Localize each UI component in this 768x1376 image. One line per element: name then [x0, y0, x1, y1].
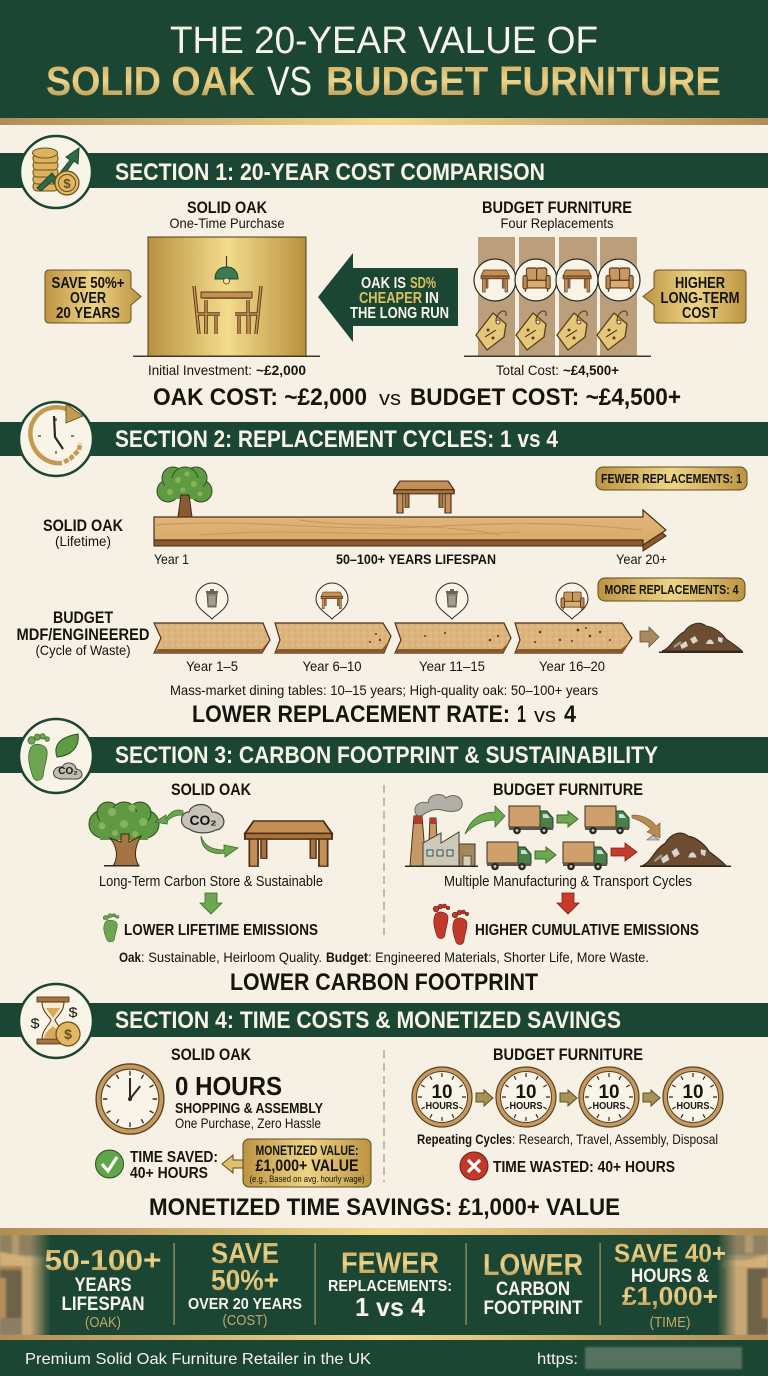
arrow: co2 to tree [155, 810, 183, 824]
arrow: oak is cheaper: IN [425, 290, 439, 307]
label: budget mdf: BUDGET [53, 608, 114, 627]
icon: green check [96, 1150, 124, 1178]
label: solid oak: SOLID OAK [187, 198, 268, 217]
caption: initial investment: ~£2,000 [256, 362, 306, 378]
year labels: Year 1–5 [186, 658, 238, 674]
footer tagline: Premium Solid Oak Furniture Retailer in the UK [25, 1351, 371, 1368]
caption: multiple cycles: Multiple Manufacturing & Transport Cycles [444, 873, 692, 890]
arrow: oak is cheaper [318, 253, 458, 342]
blurred url [585, 1347, 742, 1369]
label: solid oak lifetime: (Lifetime) [55, 533, 111, 549]
section 2 heading bar: SECTION 2: REPLACEMENT CYCLES: 1 vs 4 [115, 426, 559, 453]
stat: save 50: (COST) [222, 1312, 268, 1329]
arrow: co2 to table [201, 836, 238, 857]
label: solid oak lifetime: SOLID OAK [43, 516, 124, 535]
panel: solid oak carbon [89, 780, 332, 942]
stat: fewer replacements: FEWER [341, 1247, 439, 1280]
stat: lifespan: YEARS [74, 1275, 132, 1296]
dashed divider [383, 785, 385, 935]
label: budget mdf: (Cycle of Waste) [36, 642, 130, 658]
summary: cost [153, 384, 681, 411]
section 4 heading bar [0, 1003, 768, 1037]
stat: save time: HOURS & [631, 1266, 709, 1287]
caption: total cost: ~£4,500+ [563, 362, 619, 378]
icons: ten hour clocks [412, 1067, 723, 1127]
section 4 heading bar: SECTION 4: TIME COSTS & MONETIZED SAVINGS [115, 1007, 621, 1034]
badge: fewer replacements [596, 467, 747, 490]
callout: monetized value: £1,000+ VALUE [256, 1156, 358, 1175]
arrow: down red [557, 893, 579, 914]
arrow: to landfill [640, 627, 659, 647]
callout: monetized value [243, 1139, 371, 1187]
text: time saved: TIME SAVED: [130, 1149, 218, 1166]
callout: save 50% [45, 270, 141, 323]
caption: initial investment: Initial Investment: [148, 362, 252, 378]
icons: replacement pins [196, 583, 588, 619]
panel: budget furniture cost [464, 198, 651, 378]
callout: monetized value: MONETIZED VALUE: [256, 1142, 358, 1158]
label: solid oak: SOLID OAK [171, 780, 252, 799]
stat: save time: (TIME) [650, 1314, 690, 1331]
icon: dining table and chairs [194, 286, 261, 334]
label: budget mdf: MDF/ENGINEERED [16, 625, 150, 644]
icon: green footprint [103, 914, 119, 942]
panel: budget carbon [405, 780, 731, 945]
timeline labels: 50–100+ YEARS LIFESPAN [336, 551, 496, 567]
base line [133, 356, 320, 357]
note: oak vs budget: : Engineered Materials, Shorter Life, More Waste. [368, 949, 649, 965]
panel: solid oak time [96, 1045, 371, 1187]
icon: footprint, leaf and co2: CO₂ [58, 766, 78, 777]
summary: cost: BUDGET COST: ~£4,500+ [410, 384, 681, 411]
gold rules [0, 1228, 768, 1235]
arrow: oak is cheaper: SD% [410, 275, 436, 292]
label: solid oak lifetime [43, 516, 124, 549]
text: repeating cycles [417, 1131, 718, 1147]
text: time saved: 40+ HOURS [130, 1165, 208, 1182]
caption: total cost: Total Cost: [496, 362, 559, 378]
stat: lower carbon: CARBON [496, 1279, 570, 1300]
summary: cost: OAK COST: ~£2,000 [153, 384, 367, 411]
badge: more replacements: MORE REPLACEMENTS: 4 [604, 582, 739, 597]
title line 2: SOLID OAK [46, 58, 255, 104]
band background with oak furniture photo [0, 1228, 768, 1340]
icons: ten hour clocks: HOURS [676, 1101, 710, 1112]
section 2 heading bar [0, 422, 768, 456]
base line [464, 356, 651, 357]
icon: large table [245, 821, 332, 866]
panel: budget time [412, 1045, 723, 1180]
icon: hourglass and coin [19, 984, 93, 1058]
stat: lifespan: LIFESPAN [62, 1294, 144, 1315]
icon: co2 cloud: CO₂ [190, 812, 216, 828]
icons: price tags [476, 311, 627, 350]
arrow: down green [200, 893, 222, 914]
label: budget furniture: BUDGET FURNITURE [493, 1045, 643, 1064]
stat: save 50 [188, 1238, 302, 1329]
icon: waste heap [659, 623, 743, 653]
section 1 heading bar: SECTION 1: 20-YEAR COST COMPARISON [115, 159, 545, 186]
dashed divider [383, 1050, 385, 1182]
title line 2 [46, 58, 721, 104]
label: lower emissions: LOWER LIFETIME EMISSIONS [124, 922, 318, 939]
year labels [186, 658, 605, 674]
summary: replacement rate: vs [534, 705, 556, 727]
text: zero hours: One Purchase, Zero Hassle [175, 1115, 321, 1131]
label: four replacements: Four Replacements [500, 215, 614, 231]
timeline labels: Year 20+ [616, 551, 667, 567]
label: solid oak: SOLID OAK [171, 1045, 252, 1064]
icon: oak tree [157, 467, 212, 517]
stat: lifespan [44, 1245, 162, 1331]
icons: ten hour clocks: 10 [598, 1082, 620, 1103]
note: oak vs budget: Budget [326, 949, 368, 965]
icons: ten hour clocks: HOURS [426, 1101, 459, 1112]
arrow: factory to truck [465, 806, 505, 834]
callout: save 50%: OVER [70, 290, 106, 307]
stat: save 50: 50%+ [211, 1265, 279, 1297]
icon: co2 cloud [181, 804, 224, 833]
title line 1: THE 20-YEAR VALUE OF [170, 20, 598, 62]
stat: lifespan: 50-100+ [44, 1245, 162, 1277]
label: budget furniture: BUDGET FURNITURE [482, 198, 632, 217]
summary: carbon: LOWER CARBON FOOTPRINT [230, 969, 538, 996]
stat: fewer replacements [328, 1247, 452, 1322]
label: budget furniture: BUDGET FURNITURE [493, 780, 643, 799]
gold dining square [148, 237, 306, 356]
callout: monetized value: (e.g., Based on avg. hourly wage) [250, 1174, 365, 1184]
text: repeating cycles: : Research, Travel, Assembly, Disposal [512, 1131, 718, 1147]
callout: save 50%: 20 YEARS [56, 305, 120, 322]
icon: coins and growth arrow: $ [63, 176, 71, 191]
stat: lower carbon: FOOTPRINT [484, 1298, 583, 1319]
section 3 heading bar [0, 737, 768, 773]
stat: lower carbon [483, 1247, 583, 1319]
icons: furniture circles [474, 259, 640, 301]
arrow: oak is cheaper: THE LONG RUN [350, 305, 449, 322]
stat: lower carbon: LOWER [483, 1247, 583, 1282]
icon: landfill heap [405, 833, 731, 867]
arrow: value [222, 1155, 244, 1173]
icons: ten hour clocks: 10 [516, 1082, 536, 1103]
arrow: oak is cheaper: OAK IS [361, 275, 406, 292]
icon: large clock [96, 1064, 164, 1134]
panel: solid oak cost [133, 198, 320, 378]
footer [0, 1340, 768, 1376]
caption: initial investment [148, 362, 306, 378]
year labels: Year 6–10 [302, 658, 362, 674]
dividers [174, 1243, 601, 1325]
summary: monetized savings: MONETIZED TIME SAVINGS: £1,000+ VALUE [149, 1194, 620, 1221]
year labels: Year 11–15 [419, 658, 485, 674]
icon: footprint, leaf and co2 [19, 719, 93, 793]
stat: lifespan: (OAK) [85, 1314, 121, 1331]
icon: red footprints [433, 904, 469, 945]
title line 2: VS [267, 58, 312, 104]
icon: pendant lamp [215, 256, 238, 284]
arrows: transport flow [535, 811, 660, 863]
text: zero hours: SHOPPING & ASSEMBLY [175, 1100, 323, 1117]
summary: replacement rate: 1 [517, 701, 526, 728]
text: time saved [130, 1149, 218, 1182]
stat: fewer replacements: 1 vs 4 [355, 1292, 426, 1322]
callout: higher long-term cost [643, 270, 746, 323]
year labels: Year 16–20 [539, 658, 605, 674]
stat: save time: £1,000+ [622, 1281, 718, 1311]
timeline labels [154, 551, 667, 567]
icon: factory [410, 795, 475, 866]
icons: ten hour clocks: 10 [682, 1082, 704, 1103]
footer url: https: [537, 1351, 578, 1368]
stat: fewer replacements: REPLACEMENTS: [328, 1278, 452, 1295]
text: time wasted: TIME WASTED: 40+ HOURS [493, 1159, 675, 1176]
badge: more replacements [598, 578, 745, 601]
icon: hourglass and coin: $ [30, 1015, 40, 1031]
caption: carbon store: Long-Term Carbon Store & Sustainable [99, 873, 323, 890]
icon: red cross [460, 1152, 488, 1180]
bottom stats band [0, 1228, 768, 1340]
section 3 heading bar: SECTION 3: CARBON FOOTPRINT & SUSTAINABILITY [115, 742, 658, 769]
stat: save 50: SAVE [211, 1238, 279, 1270]
arrows: between clocks [476, 1090, 660, 1106]
title line 2: BUDGET FURNITURE [326, 58, 721, 104]
icons: ten hour clocks: HOURS [510, 1101, 543, 1112]
note: oak vs budget [119, 949, 649, 965]
icon: hourglass and coin: $ [64, 1026, 72, 1042]
arrow: oak is cheaper: CHEAPER [359, 290, 422, 307]
arrow: oak wood timeline [154, 510, 666, 551]
label: budget mdf [16, 608, 150, 658]
callout: higher long-term cost: LONG-TERM [660, 290, 740, 307]
icon: hourglass and coin: $ [68, 1004, 78, 1020]
icons: ten hour clocks: 10 [432, 1082, 452, 1103]
icon: oak table [394, 481, 454, 513]
summary: replacement rate: LOWER REPLACEMENT RATE: [192, 701, 510, 728]
summary: cost: vs [379, 388, 401, 410]
caption: total cost [496, 362, 619, 378]
summary: replacement rate: 4 [564, 701, 577, 728]
stat: save time [614, 1238, 726, 1331]
label: one-time purchase: One-Time Purchase [170, 215, 285, 231]
text: repeating cycles: Repeating Cycles [417, 1131, 512, 1147]
label: higher emissions: HIGHER CUMULATIVE EMISSIONS [475, 922, 699, 939]
section 1 heading bar [0, 153, 768, 188]
budget planks [154, 623, 632, 653]
note: lifespans: Mass-market dining tables: 10–15 years; High-quality oak: 50–100+ years [170, 682, 598, 698]
stat: save time: SAVE 40+ [614, 1238, 726, 1268]
note: oak vs budget: : Sustainable, Heirloom Quality. [141, 949, 322, 965]
icons: trucks [487, 806, 629, 870]
text: zero hours [175, 1071, 323, 1131]
callout: higher long-term cost: COST [682, 305, 718, 322]
replacement strips [478, 237, 637, 356]
stat: save 50: OVER 20 YEARS [188, 1296, 302, 1313]
text: zero hours: 0 HOURS [175, 1071, 282, 1101]
callout: save 50%: SAVE 50%+ [52, 275, 124, 292]
callout: higher long-term cost: HIGHER [675, 275, 725, 292]
note: oak vs budget: Oak [119, 949, 141, 965]
icon: clock with cycle arrow [19, 402, 93, 476]
icon: large oak tree [89, 802, 159, 866]
icon: coins and growth arrow [20, 136, 92, 208]
icons: ten hour clocks: HOURS [592, 1101, 626, 1112]
header [0, 0, 768, 125]
timeline labels: Year 1 [154, 551, 189, 567]
